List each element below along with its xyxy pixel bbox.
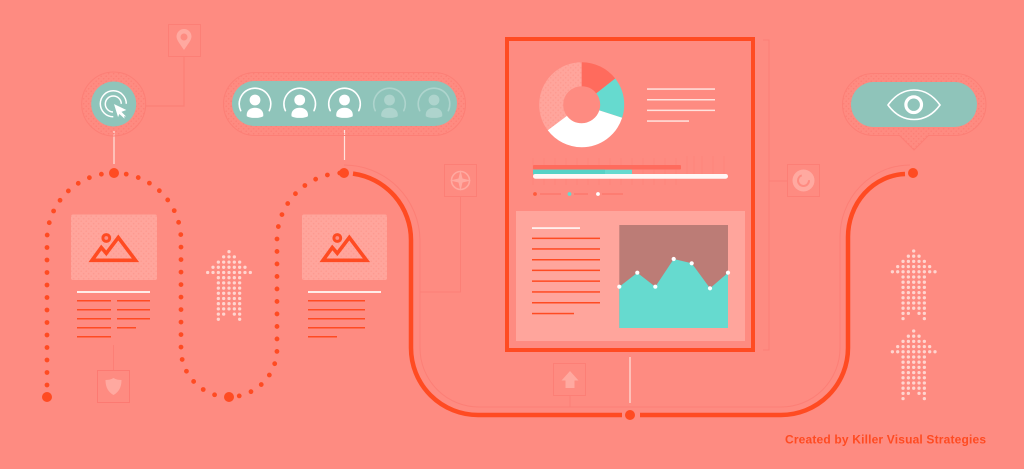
- area chart: [617, 225, 730, 328]
- eye pill: [843, 74, 986, 150]
- bar legend: [533, 192, 623, 196]
- icon: up arrow box: [554, 364, 586, 396]
- icon: crosshair box: [444, 164, 476, 196]
- report panel: [507, 39, 753, 350]
- report bracket: [763, 40, 787, 350]
- donut legend lines: [647, 88, 715, 122]
- donut chart: [551, 74, 612, 135]
- dotted path: [47, 173, 340, 397]
- dotted arrow 2: [892, 251, 935, 319]
- icon: shield box: [98, 370, 130, 402]
- icon: location pin box: [168, 24, 200, 56]
- thin outline path: [344, 165, 910, 407]
- white connector lines: [114, 130, 630, 403]
- bar chart: [533, 156, 728, 185]
- up arrow box connector: [569, 395, 571, 407]
- lower panel: [516, 211, 745, 341]
- path nodes: [42, 168, 918, 420]
- dotted arrow 1: [208, 252, 250, 319]
- crosshair box connector: [420, 196, 460, 292]
- location box connector: [146, 56, 184, 106]
- icon: target box: [788, 164, 820, 196]
- solid path: [353, 174, 905, 415]
- text block 1: [77, 291, 150, 338]
- image card 2: [302, 214, 387, 280]
- image card 1: [71, 214, 157, 280]
- dotted arrow 3: [892, 331, 935, 399]
- shield box connector: [112, 345, 114, 370]
- icon: click target: [82, 72, 146, 136]
- panel text lines: [532, 227, 600, 314]
- text block 2: [308, 291, 381, 338]
- user pill: [224, 72, 466, 136]
- credit text: Created by Killer Visual Strategies: [785, 432, 986, 446]
